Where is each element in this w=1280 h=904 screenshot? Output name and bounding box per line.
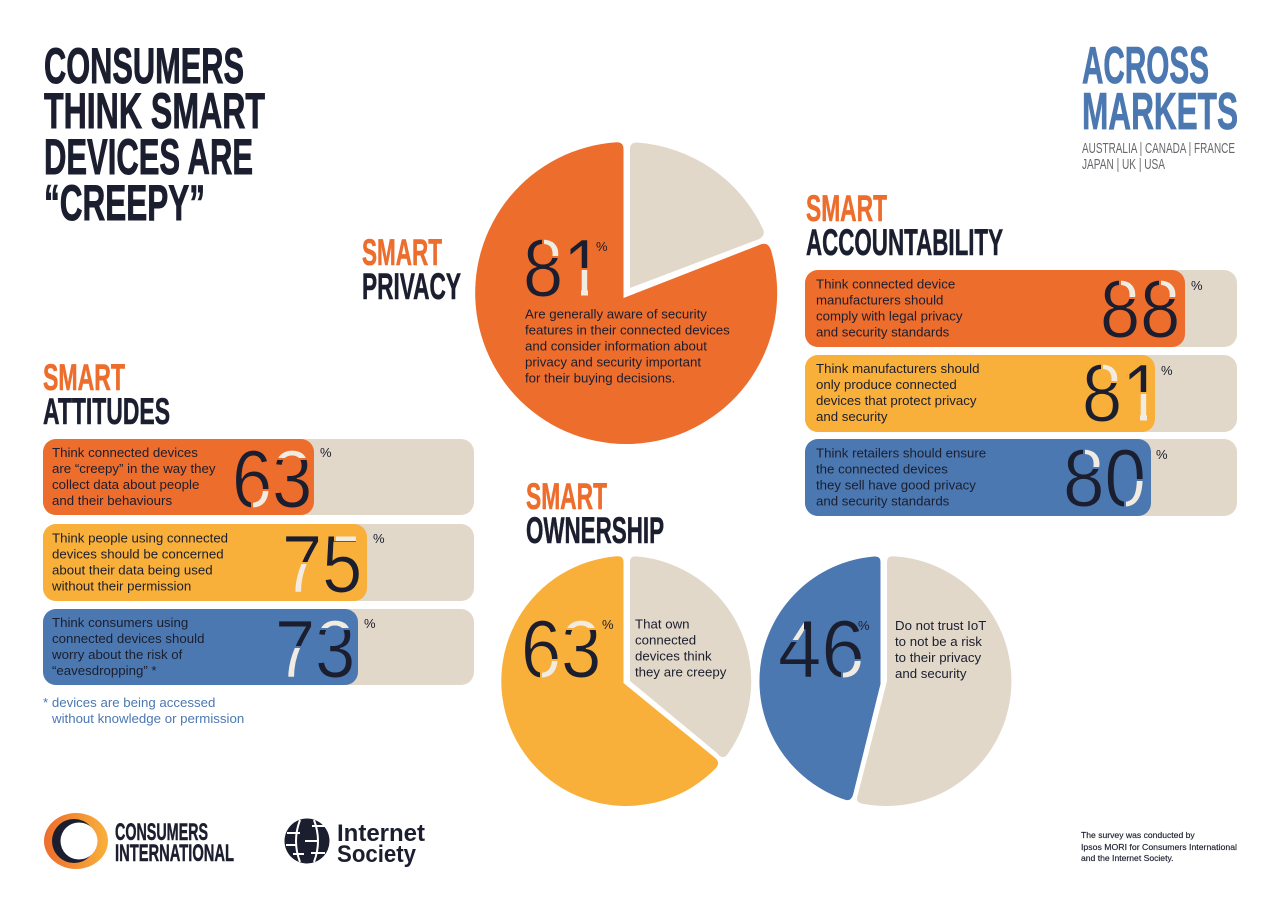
pie slice: 63 percent [501,556,718,806]
bar: 73 percent: 73 [275,604,355,695]
footnote: without knowledge or permission [51,711,244,726]
bar: 75 percent: without their permission [51,578,191,594]
panel: attitudes bars [43,434,474,695]
bar: 88 percent: % [1191,278,1203,293]
bar: 80 percent: the connected devices [816,462,948,476]
bar: 80 percent: % [1156,447,1168,462]
heading: smart attitudes [43,357,170,432]
bar: 80 percent: they sell have good privacy [816,478,976,492]
heading: smart accountability [806,188,1003,263]
bar: 81 percent [805,355,1237,432]
pie slice: remaining 19 percent [630,142,764,288]
bar: 81 percent: 81 [1082,348,1162,439]
pie slice: 46 percent [759,556,880,800]
survey note: The survey was conducted by [1081,830,1195,840]
bar: 81 percent: devices that protect privacy [816,393,977,408]
title: THINK SMART [44,83,265,139]
bar: 81 percent: 81 [1082,348,1162,439]
bar: 73 percent: Think consumers using [52,615,188,630]
bar: 75 percent: 75 [282,519,362,610]
bar: 75 percent: about their data being used [52,562,213,578]
title: “CREEPY” [44,175,205,231]
logo: Consumers International: CONSUMERS [115,819,208,846]
ownership description: devices think [635,648,712,664]
bar: 63 percent [43,439,474,515]
bar: 63 percent: are “creepy” in the way they [52,461,216,476]
number: 46 [780,620,861,678]
bar: 75 percent: % [373,531,385,546]
bar: 73 percent: “eavesdropping” * [52,663,157,678]
bar: 73 percent: connected devices should [52,631,204,646]
logo: Internet Society [284,818,425,868]
bar: 80 percent: Think retailers should ensure [816,446,986,460]
pie slice: remaining 54 percent [857,556,1011,806]
percent sign: % [858,618,870,633]
logo: Internet Society: Internet [337,820,425,847]
ownership description: connected [635,632,696,648]
distrust description: to not be a risk [895,634,982,649]
bar: 73 percent: worry about the risk of [51,647,183,662]
bar: 88 percent: comply with legal privacy [816,308,963,324]
distrust description: Do not trust IoT [895,618,986,633]
distrust description [895,618,986,681]
bar: 63 percent: collect data about people [52,477,199,492]
pie slice: remaining 37 percent [630,556,751,757]
bar: 88 percent: Think connected device [816,276,955,292]
heading: smart attitudes: ATTITUDES [43,391,170,432]
distrust description: to their privacy [895,650,982,665]
icon: ring [44,813,108,869]
market list: JAPAN | UK | USA [1082,156,1165,173]
heading: smart accountability: ACCOUNTABILITY [806,222,1003,263]
percent sign: % [596,239,608,254]
ownership description [635,616,727,680]
privacy description: features in their connected devices [525,322,730,338]
ownership description: they are creepy [635,664,727,680]
number: 63 [525,620,598,678]
privacy description: and consider information about [525,338,707,354]
logo: Internet Society: Society [337,841,417,868]
ownership description: That own [635,616,690,632]
bar: 88 percent: 88 [1100,264,1180,355]
heading: smart privacy: SMART [362,232,442,273]
title: CONSUMERS [44,38,244,94]
bar: 88 percent: manufacturers should [816,292,943,308]
bar: 73 percent [43,609,474,685]
survey note: and the Internet Society. [1081,853,1174,863]
heading: smart accountability: SMART [806,188,887,229]
bar: 81 percent: and security [816,409,888,424]
bar: 75 percent: 75 [282,519,362,610]
number: 46: 46 [778,603,865,694]
number: 81 [526,240,588,296]
pie chart: ownership 46% [759,556,1011,806]
bar: 80 percent: 80 [1063,432,1146,524]
survey note [1081,830,1237,863]
heading: smart attitudes: SMART [43,357,125,398]
bar: 88 percent [805,270,1237,347]
market list [1082,140,1235,173]
privacy description [525,306,730,386]
heading: across markets [1082,37,1238,141]
number: 63: 63 [521,604,601,695]
privacy description: privacy and security important [525,354,701,370]
number: 63: 63 [521,604,601,695]
bar: 75 percent: devices should be concerned [52,546,224,562]
bar: 81 percent: Think manufacturers should [816,361,980,376]
bar: 88 percent: and security standards [816,324,950,340]
bar: 81 percent: % [1161,363,1173,378]
bar: 80 percent: and security standards [816,494,950,508]
bar: 80 percent [805,439,1237,516]
number: 81: 81 [523,223,603,314]
bar: 75 percent: Think people using connected [52,530,228,546]
heading: smart ownership: OWNERSHIP [526,510,664,551]
percent sign: % [602,617,614,632]
heading: smart privacy: PRIVACY [362,266,461,307]
bar: 63 percent: and their behaviours [52,493,172,508]
bar: 88 percent: 88 [1100,264,1180,355]
privacy description: for their buying decisions. [525,370,675,386]
footnote: * devices are being accessed [43,695,215,710]
icon: globe [284,818,330,864]
title: DEVICES ARE [44,129,253,185]
bar: 80 percent: 80 [1063,432,1146,524]
bar: 73 percent: % [364,616,376,631]
footnote [43,695,244,726]
distrust description: and security [895,666,967,681]
pie slice: 81 percent [475,142,777,444]
bar: 63 percent: 63 [232,434,312,525]
pie chart: ownership 63% [501,556,751,806]
heading: smart ownership: SMART [526,476,607,517]
logo: Consumers International: INTERNATIONAL [115,840,234,867]
panel: accountability bars [805,264,1237,524]
bar: 81 percent: only produce connected [816,377,957,392]
logo: Consumers International [44,813,234,869]
pie chart: smart privacy 81% [475,142,777,444]
privacy description: Are generally aware of security [525,306,707,322]
number: 46: 46 [778,603,865,694]
bar: 75 percent [43,524,474,601]
heading: smart ownership [526,476,664,551]
bar: 63 percent: Think connected devices [52,445,198,460]
bar: 63 percent: 63 [232,434,312,525]
bar: 73 percent: 73 [275,604,355,695]
survey note: Ipsos MORI for Consumers International [1081,842,1237,852]
number: 81: 81 [523,223,603,314]
title [44,38,265,231]
bar: 63 percent: % [320,445,332,460]
heading: smart privacy [362,232,461,307]
